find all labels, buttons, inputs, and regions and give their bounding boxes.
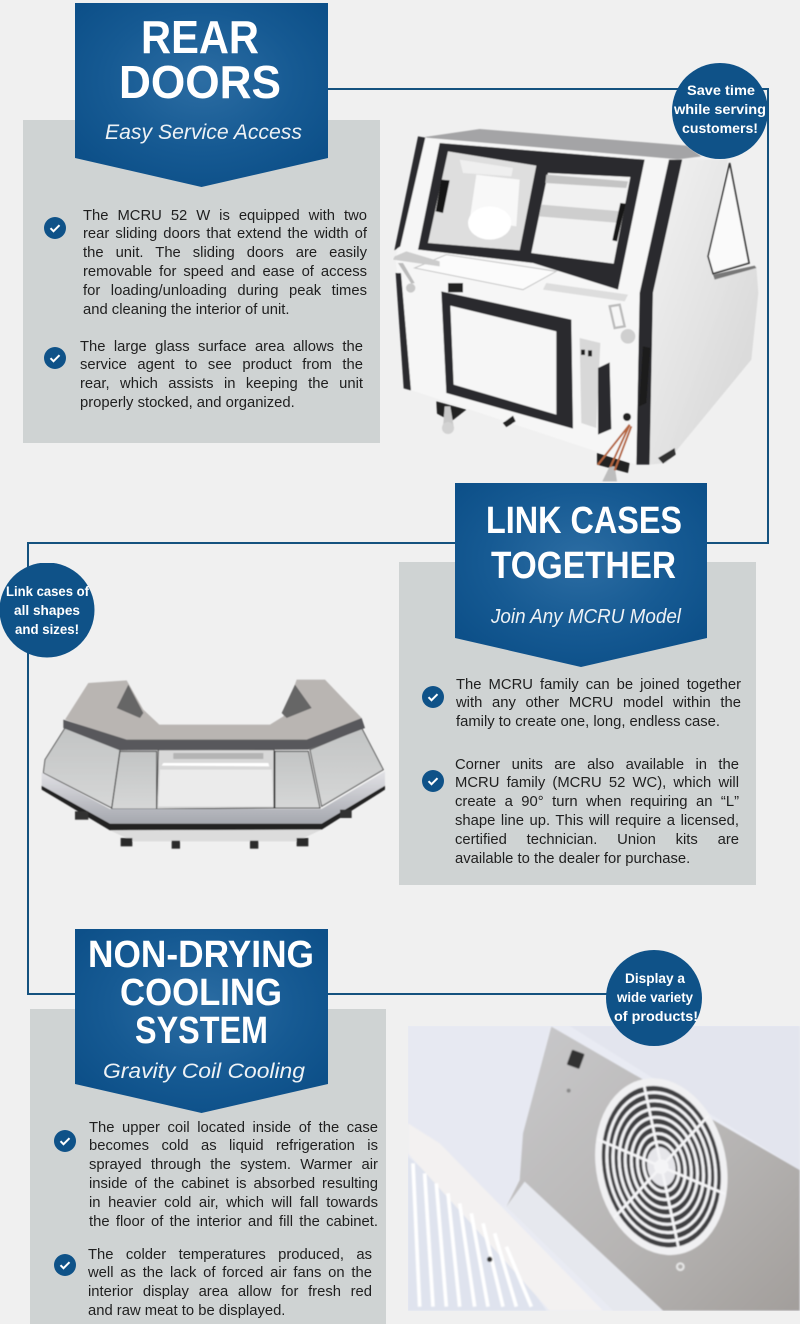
panel: cooling text background: [30, 1009, 386, 1324]
text: upper coil: in heavier cold air, which will fall towards: [89, 1195, 378, 1211]
text: upper coil: the floor of the interior and fill the cabinet.: [89, 1214, 378, 1230]
callout: link cases: [0, 563, 94, 658]
heading banner: link cases: TOGETHER: [491, 545, 676, 587]
photo: evaporator fan: [408, 1026, 800, 1311]
callout: display variety: [606, 950, 702, 1046]
heading banner: link cases: [455, 483, 707, 667]
callout: save time: Save time: [687, 82, 755, 98]
text: upper coil: [89, 1120, 378, 1230]
heading banner: cooling: NON-DRYING: [88, 934, 314, 976]
text: corner units: shape line up. This will require a licensed,: [455, 813, 739, 829]
text: sliding doors: and cleaning the interior of unit.: [83, 302, 289, 318]
text: colder temperatures: [88, 1246, 372, 1319]
callout: link cases: Link cases of: [6, 583, 89, 599]
icon: check: [54, 1130, 76, 1152]
heading banner: rear doors: [75, 3, 328, 187]
callout: display variety: Display a: [625, 970, 685, 986]
section: non-drying cooling: [30, 929, 386, 1324]
text: colder temperatures: The colder temperatures produced, as: [88, 1246, 372, 1262]
text: corner units: MCRU family (MCRU 52 WC), which will: [455, 775, 739, 791]
photo: rear of MCRU case: [393, 128, 758, 482]
text: sliding doors: [83, 208, 367, 318]
text: sliding doors: removable for speed and ease of access: [83, 264, 367, 280]
text: corner units: create a 90° turn when requiring an “L”: [455, 794, 739, 810]
heading banner: rear doors: REAR: [141, 11, 259, 63]
callout: display variety: of products!: [614, 1008, 698, 1024]
callout: link cases: and sizes!: [15, 621, 79, 637]
text: glass surface: properly stocked, and organized.: [80, 395, 295, 411]
text: upper coil: becomes cold as liquid refrigeration is: [89, 1138, 378, 1154]
heading banner: link cases: Join Any MCRU Model: [490, 606, 682, 628]
text: joining models: [456, 676, 741, 730]
text: colder temperatures: and raw meat to be displayed.: [88, 1303, 285, 1319]
text: glass surface: [80, 338, 363, 411]
heading banner: cooling: [75, 929, 328, 1113]
photo: linked U-shaped cases: [40, 679, 386, 850]
icon: check: [422, 770, 444, 792]
text: corner units: Corner units are also available in the: [455, 756, 739, 772]
callout: save time: while serving: [673, 101, 766, 117]
text: joining models: The MCRU family can be joined together: [456, 676, 741, 692]
icon: check: [44, 347, 66, 369]
text: sliding doors: the unit. The sliding doors are easily: [83, 245, 367, 261]
text: colder temperatures: interior display area allow for fresh red: [88, 1284, 372, 1300]
icon: check: [44, 217, 66, 239]
text: corner units: [455, 756, 739, 867]
text: joining models: with any other MCRU model within the: [456, 695, 741, 711]
icon: check: [422, 686, 444, 708]
text: glass surface: service agent to see product from the: [80, 357, 363, 373]
text: joining models: family to create one, long, endless case.: [456, 714, 720, 730]
text: corner units: available to the dealer for purchase.: [455, 851, 690, 867]
heading banner: rear doors: Easy Service Access: [105, 121, 302, 144]
text: sliding doors: The MCRU 52 W is equipped with two: [83, 208, 367, 224]
callout: save time: customers!: [682, 120, 758, 136]
text: upper coil: The upper coil located inside of the case: [89, 1120, 378, 1136]
text: sliding doors: rear sliding doors that extend the width of: [83, 226, 367, 242]
icon: check: [54, 1254, 76, 1276]
text: glass surface: The large glass surface area allows the: [80, 338, 363, 354]
text: upper coil: inside of the cabinet is absorbed resulting: [89, 1176, 378, 1192]
panel: rear doors text background: [23, 120, 380, 443]
section: link cases together: [399, 483, 756, 885]
heading banner: cooling: Gravity Coil Cooling: [103, 1060, 305, 1083]
panel: link cases text background: [399, 562, 756, 885]
heading banner: cooling: COOLING: [120, 972, 282, 1014]
callout: link cases: all shapes: [14, 602, 80, 618]
text: upper coil: sprayed through the system. Warmer air: [89, 1157, 378, 1173]
heading banner: rear doors: DOORS: [119, 56, 281, 108]
text: corner units: certified technician. Union kits are: [455, 832, 739, 848]
text: colder temperatures: well as the lack of forced air fans on the: [88, 1265, 372, 1281]
text: sliding doors: for loading/unloading during peak times: [83, 283, 367, 299]
section: rear doors: [23, 3, 380, 443]
callout: display variety: wide variety: [616, 989, 693, 1005]
callout: save time: [672, 63, 768, 159]
heading banner: cooling: SYSTEM: [135, 1010, 268, 1052]
text: glass surface: rear, which assists in keeping the unit: [80, 376, 363, 392]
